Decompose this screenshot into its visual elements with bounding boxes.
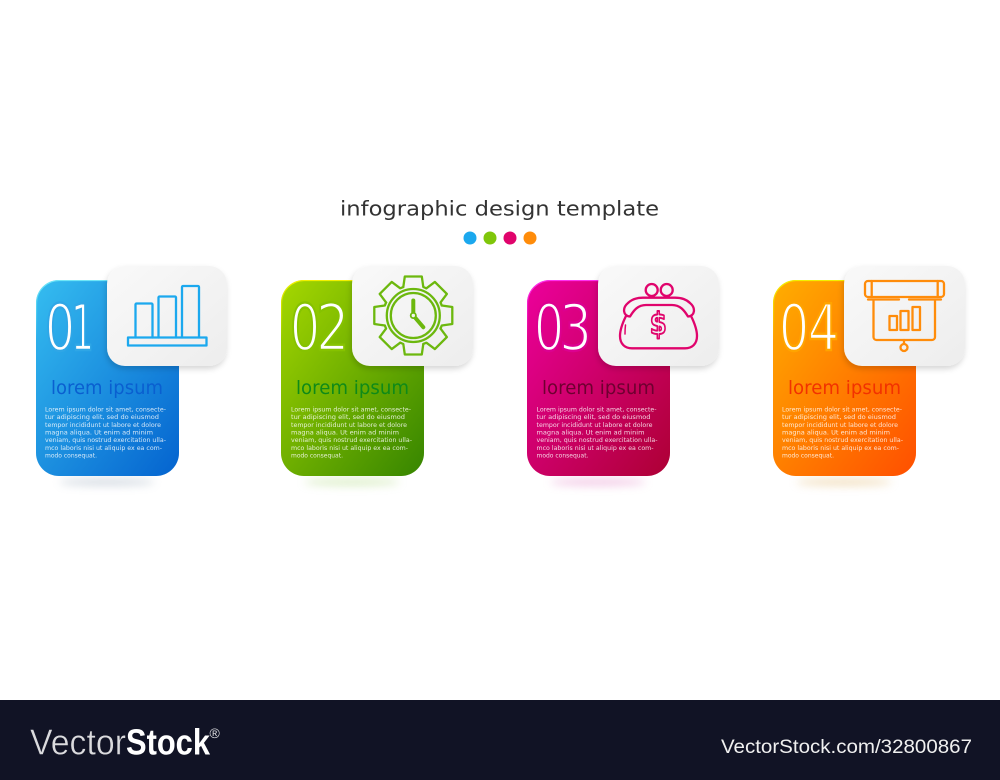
icon: coin purse with dollar — [620, 284, 697, 348]
icon: coin purse with dollar: $ — [650, 307, 667, 342]
icon tile 02 — [352, 266, 473, 366]
heading 04: lorem ipsum — [788, 377, 901, 399]
heading 02: lorem ipsum — [296, 377, 409, 399]
number 02 — [290, 292, 349, 366]
body text 01: Lorem ipsum dolor sit amet, consecte- — [45, 406, 167, 414]
body text 04: Lorem ipsum dolor sit amet, consecte- — [782, 406, 903, 414]
number 03: 3 — [559, 292, 592, 366]
dots row — [464, 232, 536, 244]
body text 01: modo consequat. — [45, 452, 97, 460]
body text 04: veniam, quis nostrud exercitation ulla- — [782, 436, 904, 444]
panel: step 04 — [773, 266, 965, 486]
body text 04: tur adipiscing elit, sed do eiusmod — [782, 413, 896, 421]
body text 01: mco laboris nisi ut aliquip ex ea com- — [45, 444, 163, 452]
icon tile 03 — [598, 266, 719, 366]
logo: VectorStock: Stock — [126, 722, 211, 762]
body text 04: mco laboris nisi ut aliquip ex ea com- — [782, 444, 900, 452]
icon: presentation board — [865, 281, 944, 351]
body text 03: mco laboris nisi ut aliquip ex ea com- — [536, 444, 654, 452]
panel: step 03 — [527, 266, 719, 486]
number 04 — [779, 292, 839, 366]
logo: VectorStock: Vector — [30, 722, 126, 762]
body text 02 — [291, 406, 413, 460]
panel: step 02 — [281, 266, 473, 486]
body text 03: tempor incididunt ut labore et dolore — [536, 421, 652, 429]
body text 01: tempor incididunt ut labore et dolore — [45, 421, 161, 429]
heading 03: lorem ipsum — [542, 377, 655, 399]
body text 02: modo consequat. — [291, 452, 343, 460]
body text 01: tur adipiscing elit, sed do eiusmod — [45, 413, 159, 421]
number 02: 2 — [316, 292, 349, 366]
icon: gear with clock — [374, 276, 452, 354]
number 02: 0 — [290, 292, 320, 366]
panel: step 01 — [36, 266, 227, 486]
body text 04: magna aliqua. Ut enim ad minim — [782, 428, 890, 436]
registered mark: ® — [210, 725, 220, 741]
logo: VectorStock — [30, 722, 211, 762]
number 04: 0 — [779, 292, 809, 366]
body text 04: tempor incididunt ut labore et dolore — [782, 421, 898, 429]
body text 03: magna aliqua. Ut enim ad minim — [536, 428, 644, 436]
body text 02: mco laboris nisi ut aliquip ex ea com- — [291, 444, 409, 452]
footer bar — [0, 700, 1000, 780]
number 03: 0 — [534, 292, 564, 366]
body text 01: veniam, quis nostrud exercitation ulla- — [45, 436, 167, 444]
body text 04 — [782, 406, 904, 460]
body text 02: veniam, quis nostrud exercitation ulla- — [291, 436, 413, 444]
body text 02: Lorem ipsum dolor sit amet, consecte- — [291, 406, 412, 414]
body text 03 — [536, 406, 658, 460]
body text 03: modo consequat. — [536, 452, 588, 460]
heading 01: lorem ipsum — [51, 377, 163, 399]
icon tile 01 — [107, 266, 227, 366]
body text 03: Lorem ipsum dolor sit amet, consecte- — [536, 406, 657, 414]
body text 03: veniam, quis nostrud exercitation ulla- — [536, 436, 658, 444]
body text 01 — [45, 406, 167, 460]
number 01: 1 — [71, 292, 94, 366]
number 01: 0 — [45, 292, 75, 366]
icon tile 04 — [844, 266, 965, 366]
body text 02: magna aliqua. Ut enim ad minim — [291, 428, 399, 436]
icon: bar chart — [128, 286, 206, 346]
title: infographic design template — [340, 196, 659, 220]
number 04: 4 — [808, 292, 839, 366]
body text 02: tur adipiscing elit, sed do eiusmod — [291, 413, 405, 421]
body text 02: tempor incididunt ut labore et dolore — [291, 421, 407, 429]
body text 03: tur adipiscing elit, sed do eiusmod — [536, 413, 650, 421]
body text 04: modo consequat. — [782, 452, 834, 460]
image id: VectorStock.com/32800867 — [721, 737, 972, 758]
body text 01: magna aliqua. Ut enim ad minim — [45, 428, 153, 436]
